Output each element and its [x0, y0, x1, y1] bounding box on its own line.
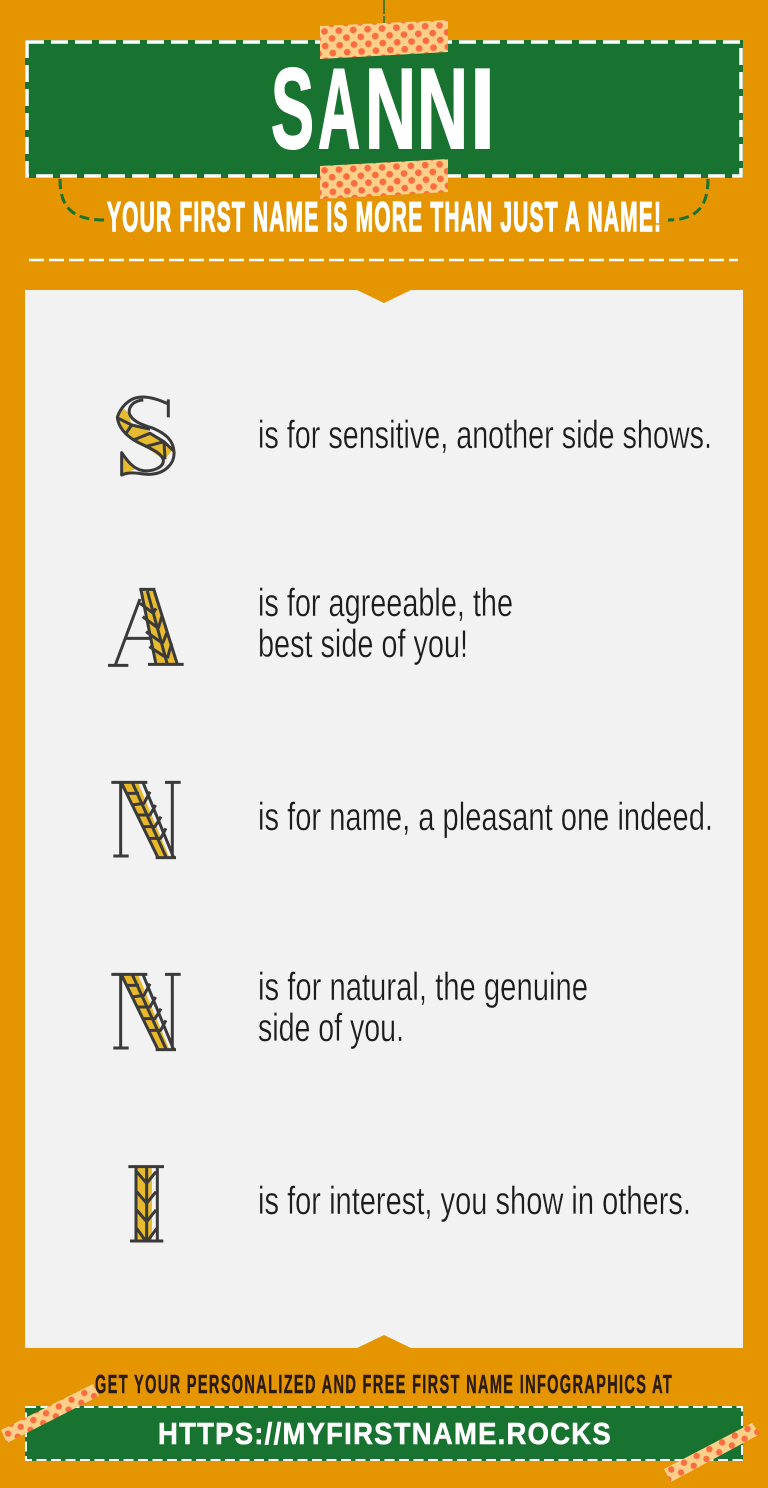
text: N second: is for natural, the genuine: [258, 966, 588, 1009]
icon: letter S: [117, 397, 174, 475]
footer URL: HTTPS://MYFIRSTNAME.ROCKS: [158, 1418, 611, 1451]
hanging string: [383, 0, 385, 24]
tagline: YOUR FIRST NAME IS MORE THAN JUST A NAME!: [107, 194, 661, 241]
left dashed bracket: [60, 179, 104, 220]
title: N: [365, 46, 416, 173]
text: A: [258, 582, 513, 666]
panel: letters: [25, 290, 743, 1348]
title: N: [417, 46, 468, 173]
text: A: is for agreeable, the: [258, 582, 513, 625]
title: [271, 46, 495, 173]
footer banner: [25, 1406, 743, 1461]
title: A: [318, 46, 360, 173]
footer prompt: GET YOUR PERSONALIZED AND FREE FIRST NAME INFOGRAPHICS AT: [95, 1371, 672, 1399]
dashed divider: [29, 259, 738, 261]
text: A: best side of you!: [258, 623, 468, 666]
tape: bottom: [320, 159, 448, 199]
title: S: [271, 46, 314, 173]
tape: footer left: [1, 1384, 99, 1443]
title banner: [25, 40, 743, 178]
tape: footer right: [664, 1423, 760, 1482]
icon: letter N second: [111, 974, 181, 1050]
text: N second: side of you.: [258, 1007, 404, 1050]
right dashed bracket: [668, 179, 708, 220]
tape: top: [320, 20, 448, 59]
text: N second: [258, 966, 588, 1050]
icon: letter I: [128, 1167, 164, 1241]
icon: letter A: [108, 589, 184, 665]
icon: letter N: [111, 782, 181, 858]
title: I: [470, 46, 495, 173]
